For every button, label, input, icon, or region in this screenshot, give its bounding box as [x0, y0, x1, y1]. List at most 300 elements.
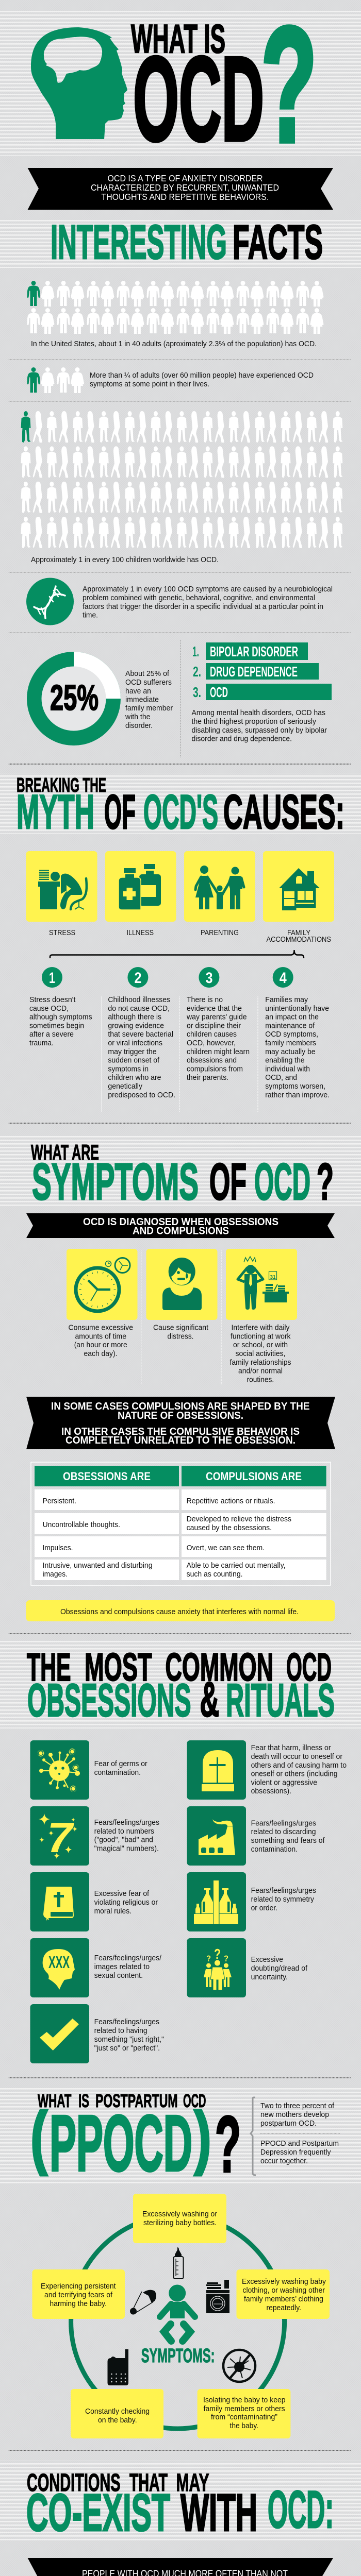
text: problem combined with genetic, behavioral, cognitive, and environmental [83, 594, 315, 602]
item: symmetry [187, 1872, 316, 1931]
box: clothing: repeatedly. [266, 2304, 301, 2312]
table: obsessions vs compulsions [31, 1462, 331, 1585]
text: related to having [94, 2027, 147, 2035]
text: sudden onset of [108, 1057, 160, 1065]
item: perfection [30, 2004, 164, 2063]
callout: anxiety [26, 1600, 335, 1621]
text: or viral infections [108, 1039, 162, 1047]
text [192, 709, 327, 743]
text: uncertainty. [251, 1973, 288, 1981]
heading: breaking the myth: BREAKING THE [17, 774, 106, 796]
text: Families may [265, 996, 308, 1004]
text [108, 996, 175, 1099]
text: OCD sufferers [125, 679, 172, 687]
panel: illness [105, 851, 176, 937]
fact: one quarter of adults [27, 367, 314, 393]
text: time. [83, 611, 98, 619]
icon: washing machine [206, 2280, 229, 2313]
text: Cause significant [153, 1324, 208, 1332]
rank 3: OCD [210, 684, 228, 700]
text [251, 1887, 316, 1912]
rank 1: 1. [192, 643, 199, 659]
text: way parents' guide [186, 1013, 247, 1022]
heading: most common obsessions and rituals [27, 1646, 335, 1727]
text [94, 1760, 147, 1777]
text: disabling cases, surpassed only by bipolar [192, 726, 327, 735]
caption: Approximately 1 in every 100 children worldwide has OCD. [31, 556, 219, 564]
text: functioning at work [231, 1332, 291, 1341]
text: Excessive [251, 1956, 283, 1964]
rank 1 [192, 642, 308, 660]
icon: germ [38, 1749, 80, 1792]
banner: co-existing disorder [28, 2558, 333, 2576]
text [68, 1324, 133, 1358]
heading: what are symptoms: SYMPTOMS [32, 1153, 199, 1211]
box: checking: on the baby. [98, 2416, 137, 2425]
text: their parents. [187, 1074, 228, 1082]
caption: In the United States, about 1 in 40 adults (aproximately 2.3% of the population) has OCD. [31, 340, 317, 348]
label [266, 929, 331, 944]
text: genetically [108, 1082, 143, 1091]
icon: lucky seven: 7 [47, 1814, 75, 1861]
box: clothing: family members’ clothing [244, 2295, 323, 2303]
box: clothing: clothing, or washing other [242, 2286, 325, 2295]
text: Fears/feelings/urges [251, 1820, 316, 1828]
icon: baby [160, 2284, 195, 2341]
icon: check mark [40, 2019, 79, 2050]
text: oneself or others (including [251, 1770, 337, 1778]
heading: breaking the myth: OF [104, 785, 136, 839]
text: although symptoms [29, 1013, 92, 1022]
text: Fears/feelings/urges [94, 1819, 159, 1827]
ring [71, 2215, 285, 2429]
text: There is no [187, 996, 223, 1004]
text: "just so" or "perfect". [94, 2044, 160, 2053]
text: family member [125, 704, 173, 713]
text: Excessive fear of [94, 1890, 150, 1898]
fact: 1 in 100 children [21, 411, 342, 564]
text [251, 1820, 325, 1854]
text: something "just right," [94, 2036, 164, 2044]
icon: stressed worker at desk [238, 1257, 289, 1310]
heading: postpartum OCD: PPOCD [50, 2099, 192, 2188]
text: Among mental health disorders, OCD has [192, 709, 325, 717]
icon: tombstone [202, 1750, 234, 1791]
text: children causes [187, 1030, 237, 1039]
text: Fears/feelings/urges [94, 2018, 159, 2026]
icon: bible [43, 1887, 74, 1921]
row 2: Uncontrollable thoughts. [43, 1521, 120, 1529]
text: About 25% of [125, 670, 170, 678]
icon: people with question marks: ? [214, 1946, 221, 1962]
text: immediate [125, 696, 159, 704]
text: sometimes begin [29, 1022, 84, 1030]
heading: conditions that may co-exist: CO-EXIST [26, 2483, 170, 2542]
text: have an [125, 687, 151, 696]
text: Fears/feelings/urges [251, 1887, 316, 1895]
banner: diagnosis: AND COMPULSIONS [133, 1225, 229, 1236]
heading: conditions that may co-exist [26, 2469, 334, 2542]
banner: compulsions and obsessions [26, 1397, 335, 1449]
number badge: 4 [280, 970, 287, 987]
box: isolating: from “contaminating” [211, 2413, 277, 2421]
panel: interfere with daily functioning [226, 1249, 297, 1384]
fact: 25 percent family member [27, 652, 173, 745]
text: Fear of germs or [94, 1760, 147, 1768]
text: and/or normal [238, 1367, 283, 1376]
text: rather than improve. [265, 1091, 330, 1099]
callout: anxiety: Obsessions and compulsions cause anxiety that interferes with normal life. [60, 1608, 299, 1616]
banner: diagnosis: OCD IS DIAGNOSED WHEN OBSESSIONS [83, 1216, 278, 1228]
heading: most common obsessions and rituals: THE [27, 1646, 71, 1689]
bracket [251, 2097, 256, 2175]
text: each day). [84, 1350, 118, 1358]
text: related to discarding [251, 1828, 316, 1836]
text: Depression frequently [260, 2148, 331, 2157]
diagram: PPOCD symptoms ring [32, 2194, 330, 2438]
myth 2 [108, 967, 175, 1099]
box: checking [71, 2389, 163, 2438]
text: Childhood illnesses [108, 996, 170, 1004]
label: FAMILY [287, 929, 310, 937]
text: OCD, and [265, 1074, 297, 1082]
box: isolating: the baby. [230, 2422, 258, 2430]
heading: postpartum OCD: ( [30, 2098, 47, 2176]
panel: family accommodations [263, 851, 334, 944]
heading: postpartum OCD [30, 2090, 241, 2189]
text: enabling the [265, 1057, 305, 1065]
item: doubt [187, 1938, 308, 1997]
row 2: caused by the obsessions. [187, 1524, 272, 1532]
text [125, 670, 173, 730]
row 4: such as counting. [187, 1570, 242, 1579]
text: others and of causing harm to [251, 1761, 347, 1770]
number badge: 3 [205, 970, 212, 987]
text: new mothers develop [260, 2111, 329, 2119]
text: although there is [108, 1013, 161, 1022]
text: Approximately 1 in every 100 OCD symptoms are caused by a neurobiological [83, 585, 333, 594]
title block [31, 0, 317, 176]
note: PPOCD facts [251, 2097, 340, 2175]
row 4: Able to be carried out mentally, [187, 1562, 286, 1570]
heading: most common obsessions and rituals: MOST [85, 1646, 152, 1689]
text: distress. [167, 1332, 194, 1341]
text: something and fears of [251, 1837, 325, 1845]
number badge [273, 967, 293, 988]
item: sexual content [30, 1938, 162, 1997]
pictogram: 4 adults [27, 367, 84, 393]
myth 1 [29, 967, 92, 1047]
item: numbers [30, 1806, 159, 1866]
text: moral rules. [94, 1907, 132, 1916]
text: Fear that harm, illness or [251, 1744, 331, 1752]
text: with the [125, 713, 151, 721]
heading: breaking the myth [17, 774, 344, 839]
icon: people with question marks: ? [224, 1954, 228, 1963]
item: germs [30, 1740, 147, 1800]
text: ("good", "bad" and [94, 1836, 153, 1844]
icon: stressed worker [38, 871, 87, 909]
icon: safety pin [130, 2290, 156, 2314]
text: obsessions and [187, 1057, 237, 1065]
text: postpartum OCD. [260, 2120, 317, 2128]
text [94, 1954, 162, 1980]
heading: postpartum OCD: OCD [183, 2090, 206, 2111]
row 3 [35, 1536, 326, 1557]
label: PARENTING [201, 929, 239, 937]
panel: consume time [67, 1249, 137, 1358]
number badge [199, 967, 219, 988]
text: images related to [94, 1963, 150, 1971]
text: an impact on the [265, 1013, 319, 1022]
row 3: Impulses. [43, 1544, 73, 1552]
text: individual with [265, 1065, 310, 1073]
text [251, 1956, 308, 1981]
donut chart: 25% [27, 652, 121, 745]
heading: conditions that may co-exist: THAT [129, 2469, 168, 2497]
label: symptoms: SYMPTOMS: [141, 2345, 215, 2367]
number badge: 2 [134, 970, 141, 987]
label: STRESS [49, 929, 75, 937]
text: PPOCD and Postpartum [260, 2140, 339, 2148]
text [251, 1744, 347, 1795]
heading: postpartum OCD: WHAT [38, 2090, 71, 2111]
text: OCD symptoms, [265, 1030, 318, 1039]
banner: compulsions and obsessions: NATURE OF OBSESSIONS. [118, 1410, 243, 1421]
box: clothing [236, 2269, 330, 2319]
row 1: Repetitive actions or rituals. [187, 1497, 275, 1505]
text [94, 1890, 158, 1916]
column header: compulsions: COMPULSIONS ARE [206, 1470, 302, 1483]
text: OCD, however, [187, 1039, 236, 1047]
heading: what is: WHAT IS [131, 16, 225, 61]
text: growing evidence [108, 1022, 164, 1030]
heading: breaking the myth: MYTH [17, 785, 94, 839]
box: isolating [198, 2389, 290, 2438]
number badge: 1 [49, 970, 55, 987]
box: fears of harm: harming the baby. [50, 2300, 107, 2308]
rank 3: 3. [193, 684, 201, 700]
text: contamination. [94, 1769, 141, 1777]
heading: breaking the myth: OCD'S [143, 785, 218, 839]
text: occur together. [260, 2157, 308, 2165]
pictogram: 40 adults [27, 281, 323, 334]
row 2: Developed to relieve the distress [187, 1515, 291, 1523]
icon: no germs [223, 2350, 255, 2382]
label: ACCOMMODATIONS [266, 936, 331, 944]
box: fears of harm: and terrifying fears of [44, 2291, 113, 2299]
icon: clocks [76, 1258, 130, 1311]
row 1 [35, 1489, 326, 1510]
text: related to numbers [94, 1827, 154, 1836]
label: ILLNESS [127, 929, 154, 937]
icon: people with question marks: ? [206, 1954, 211, 1963]
text: symptoms worsen, [265, 1082, 325, 1091]
fact: 1 in 40 adults [27, 281, 323, 348]
text: death will occur to oneself or [251, 1753, 342, 1761]
text: unintentionally have [265, 1005, 329, 1013]
text: violating religious or [94, 1899, 158, 1907]
icon: baby monitor [107, 2349, 128, 2385]
box: isolating: Isolating the baby to keep [203, 2396, 286, 2404]
box: fears of harm: Experiencing persistent [41, 2282, 116, 2291]
text: Interfere with daily [231, 1324, 290, 1332]
heading: most common obsessions and rituals: & [200, 1672, 219, 1727]
text: violent or aggressive [251, 1778, 317, 1787]
column header: obsessions: OBSESSIONS ARE [63, 1470, 151, 1483]
text [230, 1324, 291, 1384]
banner: compulsions and obsessions: COMPLETELY UNRELATED TO THE OBSESSION. [65, 1435, 296, 1446]
box: isolating: family members or others [204, 2405, 285, 2413]
heading: conditions that may co-exist: CONDITIONS [27, 2469, 121, 2497]
text: may actually be [265, 1048, 316, 1056]
text: or school, or with [233, 1341, 288, 1349]
banner: definition [28, 168, 333, 210]
rank 1: BIPOLAR DISORDER [210, 643, 298, 659]
text [186, 996, 250, 1082]
text: the third highest proportion of seriously [192, 718, 317, 726]
myth 4 [265, 967, 330, 1099]
number badge [127, 967, 148, 988]
text: sexual content. [94, 1972, 143, 1980]
text: may trigger the [108, 1048, 157, 1056]
icon: head with xxx [43, 1949, 75, 1990]
text: contamination. [251, 1845, 298, 1854]
heading: postpartum OCD: ) [194, 2098, 211, 2176]
donut chart: 25%: 25% [50, 677, 99, 718]
item: harm [187, 1740, 347, 1800]
text: symptoms in [108, 1065, 149, 1073]
text: compulsions from [187, 1065, 243, 1073]
fact: neurobiological cause [26, 578, 333, 625]
icon: factory [199, 1819, 235, 1855]
rank 2: 2. [193, 664, 201, 680]
text: routines. [247, 1376, 274, 1384]
column header: compulsions [182, 1466, 326, 1486]
text: trauma. [29, 1039, 54, 1047]
text: or order. [251, 1904, 277, 1912]
rank 3 [193, 684, 332, 700]
item: discarding [187, 1806, 325, 1866]
icon: crying woman [162, 1258, 202, 1310]
icon: stressed worker at desk: 31 [270, 1275, 276, 1280]
caption: More than ¼ of adults (over 60 million people) have experienced OCD [90, 371, 314, 380]
banner: definition: CHARACTERIZED BY RECURRENT, UNWANTED [91, 182, 279, 193]
icon: DNA [26, 578, 74, 625]
text: obsessions). [251, 1787, 291, 1795]
text [260, 2102, 340, 2165]
heading: conditions that may co-exist: WITH [180, 2483, 257, 2542]
text [265, 996, 330, 1099]
row 1: Persistent. [43, 1497, 76, 1505]
panel: distress [146, 1249, 218, 1341]
icon: house [279, 868, 320, 910]
caption: symptoms at some point in their lives. [90, 380, 209, 388]
icon: symmetric bottles [194, 1880, 238, 1924]
row 2 [35, 1513, 326, 1534]
text: that severe bacterial [108, 1030, 173, 1039]
panel: parenting [184, 851, 255, 937]
text: Two to three percent of [260, 2102, 335, 2110]
heading: postpartum OCD: POSTPARTUM [95, 2090, 178, 2111]
icon: baby bottle [173, 2247, 184, 2279]
icon: people with question marks [204, 1946, 232, 1990]
text [29, 996, 92, 1047]
icon: head with xxx: XXX [48, 1953, 70, 1972]
text: family members [265, 1039, 316, 1047]
text [153, 1324, 208, 1341]
panel: stress [26, 851, 97, 937]
fact: ranking of disabling disorders [192, 642, 332, 743]
heading: most common obsessions and rituals: OBSESSIONS [27, 1675, 191, 1726]
number badge [42, 967, 62, 988]
text: factors that trigger the disorder in a specific individual at a particular point in [83, 603, 323, 611]
text: do not cause OCD, [108, 1005, 170, 1013]
caption [90, 371, 314, 388]
text: maintenance of [265, 1022, 315, 1030]
text: disorder and drug dependence. [192, 735, 292, 743]
banner: compulsions and obsessions: IN SOME CASES COMPULSIONS ARE SHAPED BY THE [51, 1401, 309, 1412]
text: predisposed to OCD. [108, 1091, 175, 1099]
rank 2: DRUG DEPENDENCE [210, 664, 298, 680]
heading: most common obsessions and rituals: COMMON [165, 1646, 273, 1689]
text: Consume excessive [68, 1324, 133, 1332]
heading: postpartum OCD: ? [215, 2100, 241, 2189]
text: "magical" numbers). [94, 1844, 159, 1853]
text: cause OCD, [29, 1005, 69, 1013]
bracket [50, 950, 304, 958]
heading: what are symptoms: ? [317, 1153, 334, 1211]
icon: family [195, 866, 244, 909]
text: children who are [108, 1074, 161, 1082]
box: bottles: Excessively washing or [142, 2210, 217, 2218]
myth 3 [186, 967, 250, 1082]
text: after a severe [29, 1030, 74, 1039]
text [94, 2018, 164, 2053]
text: or discipline their [187, 1022, 241, 1030]
text: (an hour or more [74, 1341, 127, 1349]
text: disorder. [125, 722, 153, 730]
text: Fears/feelings/urges/ [94, 1954, 162, 1962]
text: amounts of time [75, 1332, 126, 1341]
banner: diagnosis [26, 1213, 335, 1238]
banner: compulsions and obsessions: IN OTHER CASES THE COMPULSIVE BEHAVIOR IS [61, 1426, 300, 1437]
box: bottles: sterilizing baby bottles. [143, 2219, 217, 2227]
row 4 [35, 1560, 326, 1580]
rank 2 [193, 663, 319, 680]
heading: conditions that may co-exist: MAY [176, 2469, 209, 2497]
icon: head with brain [31, 27, 127, 139]
box: checking: Constantly checking [85, 2408, 150, 2416]
box: bottles [133, 2194, 226, 2243]
text [83, 585, 333, 619]
pictogram: 100 children [21, 411, 342, 548]
box: fears of harm [32, 2269, 125, 2319]
box: clothing: Excessively washing baby [242, 2278, 326, 2286]
heading: postpartum OCD: IS [78, 2090, 89, 2111]
row 4: images. [43, 1570, 68, 1579]
item: religion [30, 1872, 158, 1931]
text: doubting/dread of [251, 1964, 308, 1973]
text: children might learn [187, 1048, 250, 1056]
row 4: Intrusive, unwanted and disturbing [43, 1562, 152, 1570]
icon: lucky seven [39, 1814, 77, 1861]
text [94, 1819, 159, 1853]
heading: what are symptoms: OF [209, 1153, 247, 1211]
text: Stress doesn't [29, 996, 75, 1004]
icon: medicine bottles [119, 864, 161, 910]
text: family relationships [230, 1359, 291, 1367]
